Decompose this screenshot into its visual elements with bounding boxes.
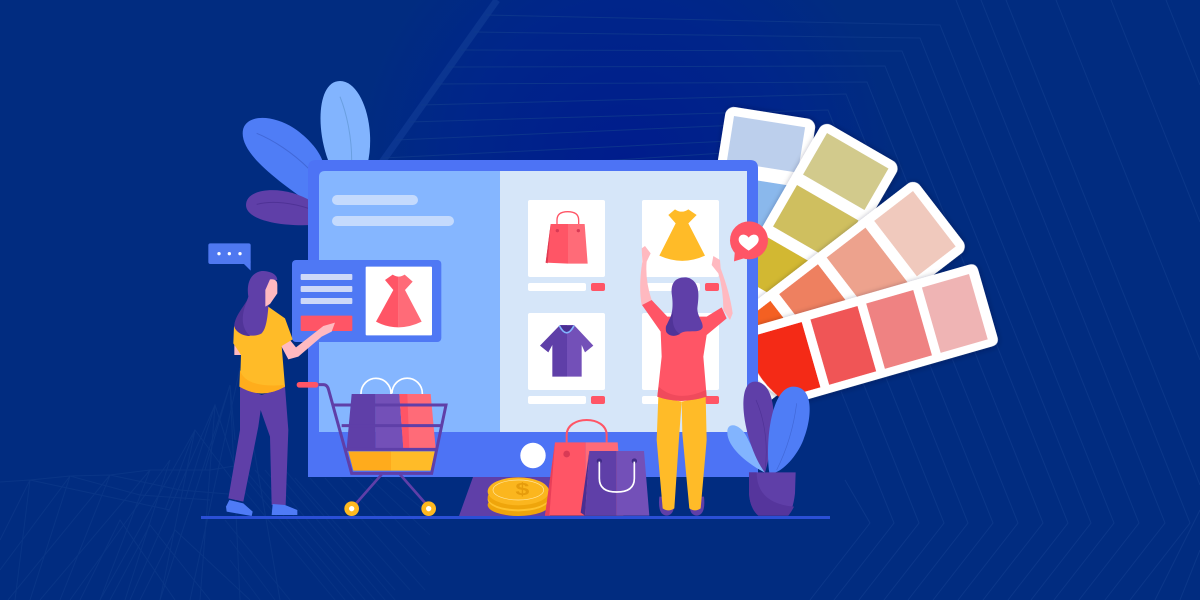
speech bubble with dots	[208, 243, 251, 271]
swatch strip: red	[736, 263, 1000, 413]
swatch strip: orange	[709, 178, 968, 406]
gold coins: $	[515, 479, 529, 499]
legs and shoes	[657, 397, 707, 516]
product card: red bag	[528, 200, 605, 291]
shopping cart with bags	[297, 378, 446, 516]
swatch strip: blue	[694, 106, 816, 326]
power button	[520, 443, 546, 468]
heart speech bubble	[730, 221, 768, 261]
thick faint diagonal band	[380, 0, 497, 165]
red shopping bag	[545, 420, 623, 516]
product card: yellow dress	[642, 200, 719, 291]
monitor stand	[459, 477, 550, 516]
gold coins	[488, 477, 549, 516]
monitor	[308, 160, 758, 477]
floating product panel	[292, 260, 441, 342]
product card: hidden by shopper	[642, 313, 719, 404]
leaves behind monitor	[243, 81, 370, 225]
product grid	[528, 200, 719, 404]
woman with yellow shirt	[226, 271, 335, 516]
sidebar text bars	[332, 195, 454, 226]
swatch strip: yellow	[704, 121, 901, 372]
purple shopping bag	[581, 451, 649, 516]
ground line	[201, 516, 830, 519]
product card: purple t-shirt	[528, 313, 605, 404]
woman with red shirt	[640, 246, 733, 516]
potted plant	[727, 382, 810, 516]
lower-left mesh	[0, 368, 430, 600]
torso, arms and hair	[640, 246, 733, 401]
colour swatch fan	[694, 106, 1000, 413]
